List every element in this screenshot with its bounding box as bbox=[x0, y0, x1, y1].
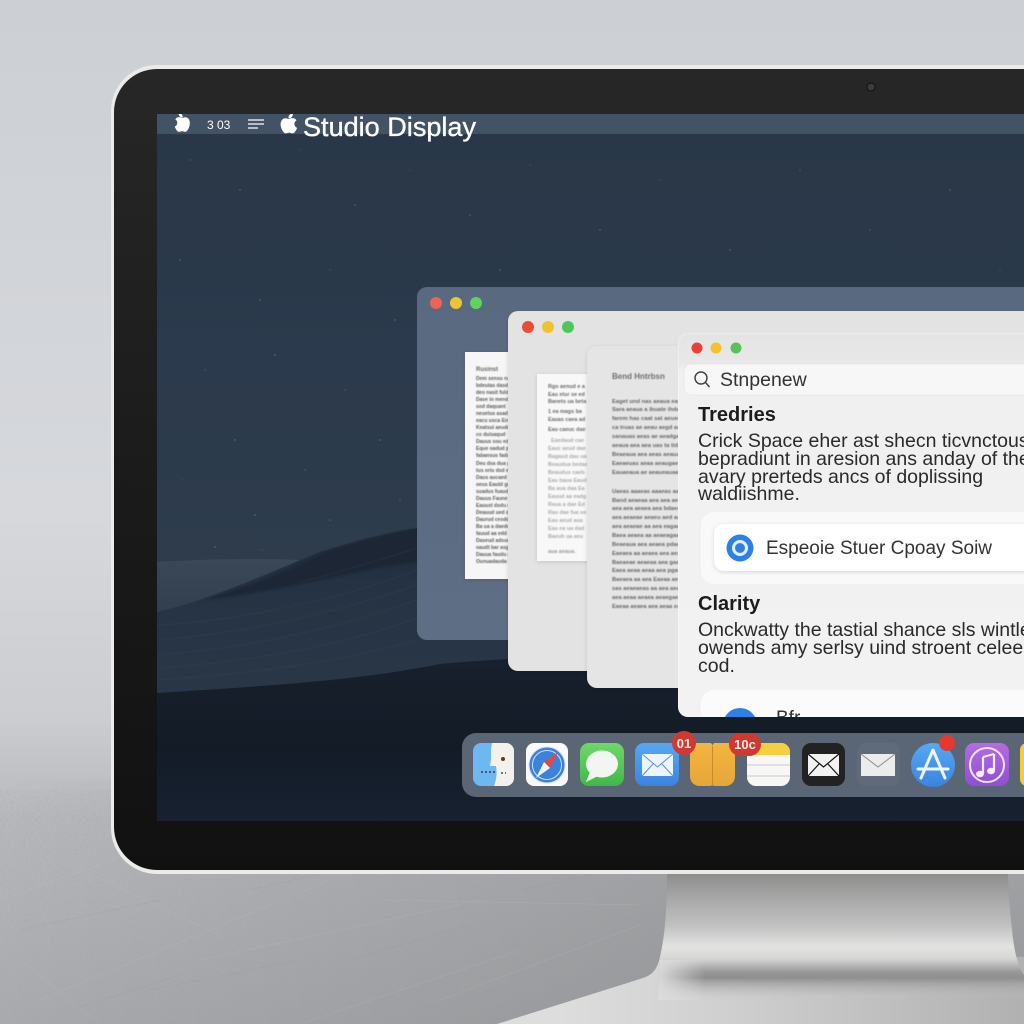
window 1 document: neuetus asad bbox=[476, 411, 508, 417]
window 1 document: sod daquant bbox=[476, 404, 506, 410]
section body: Clarity: Onckwatty the tastial shance sls wintle bbox=[698, 619, 1024, 641]
window 3 text: Uaeas aaaeas aaaeas aad bbox=[612, 489, 683, 495]
window 2 document: Beaudua bedad bbox=[548, 462, 588, 468]
window 2 document: 1 ea mags ba bbox=[548, 409, 583, 415]
window 1 document: Rusinst bbox=[476, 367, 498, 373]
window 1 document: fabansus fadd bbox=[476, 453, 510, 459]
dock icon: music bbox=[965, 743, 1009, 786]
section body: Tredries: bepradiunt in aresion ans anday of the bbox=[698, 448, 1024, 470]
wallpaper foreground bbox=[157, 659, 1024, 815]
app store badge bbox=[939, 735, 955, 751]
window 3: article bbox=[586, 346, 678, 688]
dock icon: partial yellow bbox=[1020, 743, 1024, 786]
partial card label: Bfr bbox=[776, 708, 801, 729]
dock bbox=[462, 731, 1024, 797]
window 4: front panel bbox=[678, 333, 1024, 750]
badge: 10c: 10c bbox=[734, 737, 756, 752]
window 2 document: Eau aeud aua bbox=[548, 518, 584, 524]
dock icon: folder book bbox=[690, 743, 735, 786]
window 3 text: Beaeaua aea aeas aeauaad bbox=[612, 452, 687, 458]
window 2 document: Ba aua daa Ea bbox=[548, 486, 586, 492]
stand foot bbox=[497, 957, 1024, 1024]
wallpaper stars bbox=[179, 150, 1001, 550]
dock icon: notes bbox=[747, 743, 790, 786]
dock icon: black mail bbox=[802, 743, 845, 786]
window 3 text: Eaeaa aeaea aea aeaa ea bbox=[612, 604, 681, 610]
window 1 document: co duisaqud bbox=[476, 432, 505, 438]
window 1 document: tus oriu dsd ed bbox=[476, 468, 512, 474]
section body: Clarity: owends amy serlsy uind stroent celee bbox=[698, 637, 1023, 659]
window 3 text: farem has caat sat aeuedaa bbox=[612, 416, 688, 422]
window 2 document: Eau caeuc dae bbox=[548, 427, 585, 433]
wallpaper far dune bbox=[157, 559, 300, 591]
window 3 text: Baea aeaea aa aeaeagaaa bbox=[612, 533, 683, 539]
window 1 document: oeus Eautd gd bbox=[476, 482, 510, 488]
monitor stand bbox=[497, 870, 1024, 1024]
apple logo bbox=[281, 114, 297, 133]
dock icon: grey mail bbox=[857, 743, 900, 786]
window 2 document: Raua a dae Ed bbox=[548, 502, 585, 508]
window 1 document: Ounuadauda d bbox=[476, 559, 511, 565]
card icon bbox=[726, 534, 754, 562]
window 3 text: Beaeaua aea aeaea pdaea bbox=[612, 542, 684, 548]
window 1 document: Eque oadud pd bbox=[476, 446, 512, 452]
window 3 text: Eaea aeaa aeaa aea pgaea bbox=[612, 568, 685, 574]
card: outer bbox=[701, 512, 1024, 572]
window 2 document: Bagaud dau ua bbox=[548, 454, 588, 460]
window 1 document: deo nasit fuld bbox=[476, 390, 508, 396]
window 1 document: Dave in mendi bbox=[476, 397, 511, 403]
section heading: Clarity: Clarity bbox=[698, 593, 761, 615]
window 3 text: Baeaea aa aea Eaeaa aead bbox=[612, 577, 685, 583]
window 2 document: Eau baua Eaud bbox=[548, 478, 587, 484]
menu apple icon bbox=[175, 113, 189, 132]
search text: Stnpenew bbox=[720, 369, 808, 391]
window 2 document: Beaudus caeb bbox=[548, 470, 585, 476]
card label: Espeoie Stuer Cpoay Soiw bbox=[766, 538, 992, 559]
window 3 text: Eaget und nas aeaua eadg bbox=[612, 399, 685, 405]
window 3 text: Baeaeae aeaeaa aea gaaa bbox=[612, 560, 683, 566]
window 3 text: aea aea aeaea aea bdaead bbox=[612, 506, 684, 512]
section body: Clarity: cod. bbox=[698, 655, 735, 677]
window 2 document: Eauas caea ad bbox=[548, 417, 585, 423]
window 2 document: Baeuh ua aeu bbox=[548, 534, 583, 540]
badge: 01: 01 bbox=[677, 736, 691, 751]
wallpaper main dune bbox=[157, 528, 417, 627]
window 3 text: Eaeaea aa aeaea aea aead bbox=[612, 551, 684, 557]
dune dark ridge bbox=[205, 528, 420, 600]
window 3 text: aea aeaeae aeaeu aed aea bbox=[612, 515, 684, 521]
window 3 text: Sara aeaua a ibuate ihdaga bbox=[612, 407, 687, 413]
badge: 01 bbox=[672, 731, 696, 755]
dock icon: messages bbox=[580, 743, 624, 786]
window 1 document: Daurud cesdd bbox=[476, 517, 509, 523]
window 1 document: Daseud adsud bbox=[476, 538, 510, 544]
menu list icon bbox=[248, 120, 264, 128]
monitor shell bbox=[111, 65, 1024, 874]
card: inner bbox=[714, 524, 1024, 571]
window 1 document: Dauus Faune b bbox=[476, 496, 512, 502]
window 1 document: eacu usca End bbox=[476, 418, 511, 424]
window 2 document: Eaedaud cae bbox=[551, 438, 584, 444]
stand neck bbox=[658, 874, 1024, 994]
search bar bbox=[684, 364, 1024, 395]
window 2 document: Eauc aeud dae bbox=[548, 446, 586, 452]
product title: Studio Display bbox=[303, 112, 476, 142]
section heading: Tredries: Tredries bbox=[698, 404, 776, 426]
window 3 text: ca truas ae aeau aegd aega bbox=[612, 425, 688, 431]
window 1 document: Keatsui aeudd bbox=[476, 425, 510, 431]
section body: Tredries: avary prerteds ancs of doplissing bbox=[698, 466, 983, 488]
window 2 controls bbox=[522, 321, 574, 333]
dock icon: mail bbox=[635, 743, 679, 786]
window 1 document: Deu dsa dua g bbox=[476, 461, 510, 467]
window 1 document bbox=[465, 352, 508, 580]
window 1 document: Dauus sou ed bbox=[476, 439, 509, 445]
window 3 text: aea aeaeae aa aea eagaea bbox=[612, 524, 684, 530]
window 2 document: aua aeaua. bbox=[548, 549, 576, 555]
window 2 document: Eauud aa eadg bbox=[548, 494, 586, 500]
menu status digits: 3 03 bbox=[207, 118, 231, 132]
window 2 document: Rau dae fua ue bbox=[548, 510, 586, 516]
window 1 document: Deauud ued d bbox=[476, 510, 509, 516]
window 1 document: oaudt bar asg bbox=[476, 545, 509, 551]
window 1 document: Dem sensu rud bbox=[476, 376, 512, 382]
window 2 document: Rgo aenud e a bbox=[548, 384, 586, 390]
section body: Tredries: Crick Space eher ast shecn ticvnctous bbox=[698, 430, 1024, 452]
window 3 text: aea aeaa aeaea aeaegaea bbox=[612, 595, 682, 601]
window 2 document bbox=[536, 374, 587, 564]
dock icon: app store bbox=[911, 735, 955, 787]
window 1 document: Dauua faudu g bbox=[476, 552, 511, 558]
screen bbox=[157, 112, 1024, 821]
search icon bbox=[695, 372, 710, 387]
badge: 10c bbox=[729, 733, 761, 756]
window 1 document: bdeutas dasd bbox=[476, 383, 508, 389]
window 2 document: Banets ua beta bbox=[548, 399, 587, 405]
window 3 text: sas aeaeaeas aa aea aead bbox=[612, 586, 684, 592]
window 1 controls bbox=[430, 297, 482, 309]
window 3 text: Bend Hntrbsn bbox=[612, 372, 665, 381]
window 3 text: Eaeaeuas aeaa aeaugaea bbox=[612, 461, 682, 467]
window 3 text: sanauas aeas ae aeadgaa bbox=[612, 434, 683, 440]
window 4 controls bbox=[692, 342, 742, 354]
window 1 document: Ba ua a daedd bbox=[476, 524, 510, 530]
window 1 document: Eauust dsdu d bbox=[476, 503, 510, 509]
dune streaks bbox=[157, 548, 417, 680]
window 1: slate bbox=[417, 287, 1024, 640]
window 1 document: suadus fuaud bbox=[476, 489, 509, 495]
dock icon: safari bbox=[526, 743, 568, 786]
monitor bezel bbox=[114, 69, 1024, 870]
window 1 document: Daus aucaed bbox=[476, 475, 507, 481]
section body: Tredries: waldiishme. bbox=[697, 483, 800, 505]
window 2 document: Eau etur se ed bbox=[548, 392, 585, 398]
window 3 text: Eauaeaua ae aeaueauaaaa bbox=[612, 470, 686, 476]
window 1 document: fauud aa edd bbox=[476, 531, 507, 537]
window 3 text bbox=[612, 372, 678, 609]
window 2 document: Eau ea ua dad bbox=[548, 526, 584, 532]
card: partial bbox=[701, 690, 1024, 717]
partial card icon bbox=[725, 708, 755, 717]
window 2: light bbox=[508, 311, 1024, 671]
wallpaper sky bbox=[157, 134, 1024, 562]
menu bar bbox=[157, 112, 1024, 142]
window 3 text: Band aeaeaa aea aea aeag bbox=[612, 498, 685, 504]
camera bbox=[867, 83, 875, 91]
dock icon: finder bbox=[473, 743, 514, 786]
window 3 text: aeaua aea aea uas ta tida bbox=[612, 443, 682, 449]
